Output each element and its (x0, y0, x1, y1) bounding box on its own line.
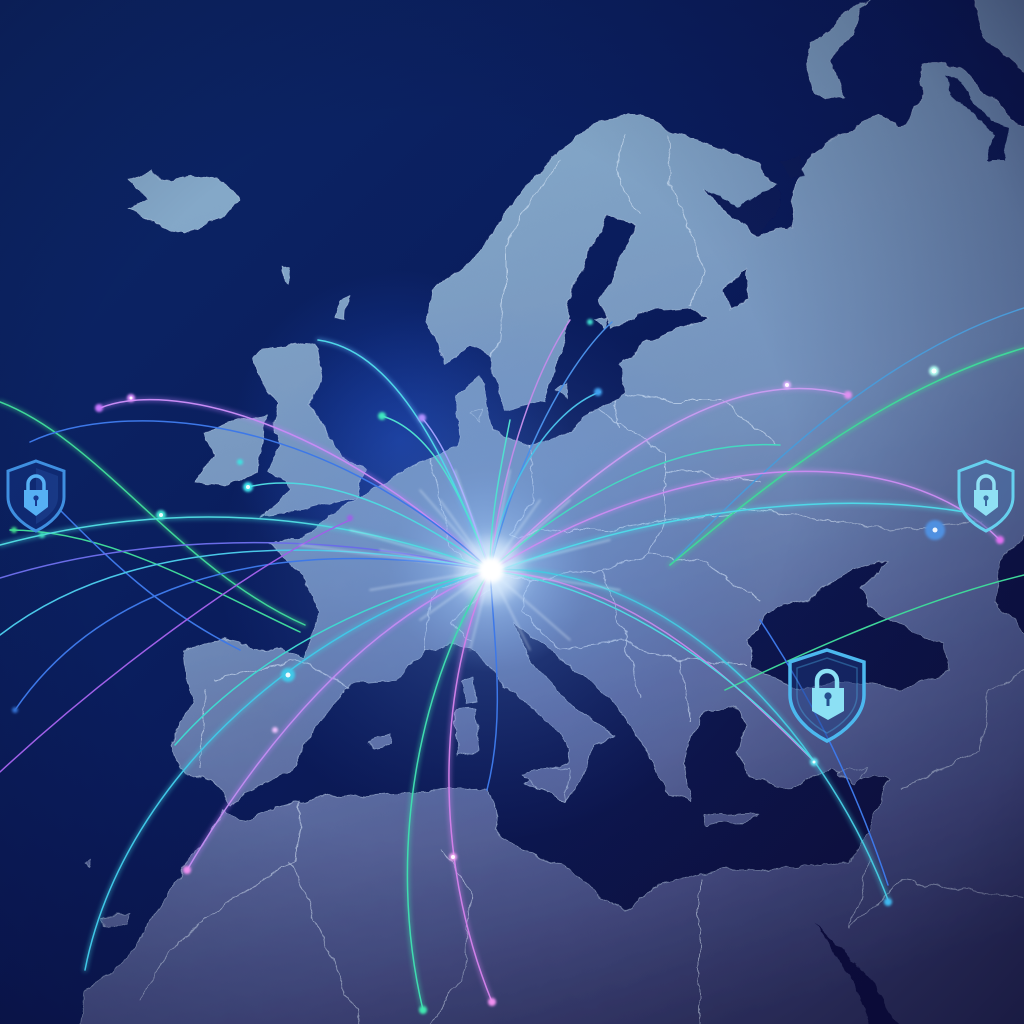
landmass: Crete (702, 812, 760, 824)
landmass: Iceland (128, 168, 238, 234)
landmass: Sicily (520, 768, 570, 800)
landmass: Ireland (194, 412, 266, 485)
landmass: Great Britain (252, 342, 364, 515)
arcs: southern bundle (85, 570, 497, 1010)
node cores (130, 368, 938, 859)
landmass: Sardinia (456, 708, 478, 756)
icon: Black Sea security shield (790, 650, 864, 741)
arcs: starburst rays (300, 470, 620, 650)
landmass: Cyprus (838, 766, 868, 784)
node halos (11, 319, 1004, 1014)
landmass: Faroe (280, 265, 290, 285)
network arcs (0, 308, 1024, 1010)
ocean glow (200, 260, 600, 620)
arcs glow layer (0, 340, 1024, 1010)
arcs: northern bundle (490, 320, 612, 570)
landmass: Novaya Zemlya (808, 0, 880, 100)
landmass: Balearics (365, 735, 392, 750)
landmass: Gotland and Danish isles (470, 316, 606, 424)
landmass: Shetland (338, 296, 348, 320)
landmass: Canary Islands (84, 860, 130, 926)
network node dots (11, 319, 1004, 1014)
country borders (140, 135, 1024, 1024)
landmass: north-east corner (970, 0, 1024, 85)
icon: left security shield (8, 461, 64, 531)
arcs: eastern bundle (490, 308, 1024, 900)
arcs: western bundle (0, 340, 490, 772)
central bright node (460, 540, 520, 600)
central glow (220, 300, 760, 840)
water detail: White Sea, north-east inlets and Red Sea (705, 72, 1012, 1024)
icon: right security shield (959, 461, 1013, 531)
landmass: Corsica (462, 678, 476, 704)
